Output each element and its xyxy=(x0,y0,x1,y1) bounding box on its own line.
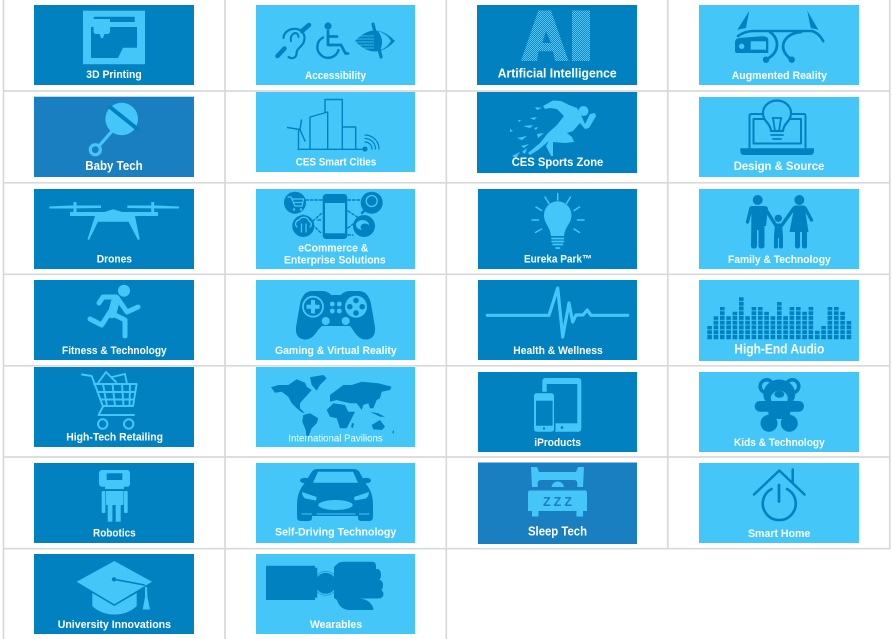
icon: car front xyxy=(297,469,373,521)
icon: laptop with bulb xyxy=(740,100,814,155)
label: High-Tech Retailing xyxy=(66,432,163,444)
icon: game controller xyxy=(296,291,375,340)
label: Kids & Technology xyxy=(734,437,825,449)
icon: shopping cart xyxy=(82,372,137,429)
icon: tablet and phone xyxy=(532,378,581,433)
label: 3D Printing xyxy=(86,69,142,81)
label: Wearables xyxy=(310,619,362,631)
label: Enterprise Solutions xyxy=(284,254,386,266)
tile: Artificial Intelligence xyxy=(477,5,637,85)
label: Augmented Reality xyxy=(732,70,828,82)
tile: Wearables xyxy=(256,554,415,634)
label: Smart Home xyxy=(748,528,810,540)
tile: Self-Driving Technology xyxy=(256,463,415,543)
icon: smart city skyline xyxy=(288,100,379,152)
icon: bed with zzz: ZZZ xyxy=(543,495,572,509)
label: CES Sports Zone xyxy=(512,155,604,169)
label: Health & Wellness xyxy=(513,345,603,357)
tile: High-Tech Retailing xyxy=(34,367,194,447)
icon: running person xyxy=(90,285,138,336)
label: Artificial Intelligence xyxy=(498,66,617,80)
label: Gaming & Virtual Reality xyxy=(275,345,398,357)
icon: audio equalizer xyxy=(705,297,853,339)
tile: CES Sports Zone xyxy=(477,92,637,173)
tile: International Pavilions xyxy=(256,367,415,447)
icon: AR glasses xyxy=(735,11,823,63)
icon: heartbeat line xyxy=(487,288,628,337)
icon: AI circuit letters xyxy=(521,10,590,61)
label: Baby Tech xyxy=(85,159,143,173)
tile: University Innovations xyxy=(34,554,194,634)
icon: drone xyxy=(49,202,179,240)
label: International Pavilions xyxy=(288,434,383,445)
icon: teddy bear xyxy=(755,380,804,432)
tile: Sleep Tech xyxy=(478,462,637,544)
icon: light bulb with rays xyxy=(532,194,584,248)
tile: Drones xyxy=(34,189,194,269)
tile: Design & Source xyxy=(699,97,859,177)
label: University Innovations xyxy=(58,619,171,631)
tile: Accessibility xyxy=(256,5,415,85)
icon: 3D printer xyxy=(83,11,145,64)
label: iProducts xyxy=(534,437,581,449)
tile: Gaming & Virtual Reality xyxy=(256,280,415,360)
icon: phone network xyxy=(284,192,383,239)
label: Fitness & Technology xyxy=(62,345,168,357)
icon: world map xyxy=(271,375,394,438)
tile: 3D Printing xyxy=(34,5,194,85)
label: Eureka Park™ xyxy=(524,254,592,266)
tile: High-End Audio xyxy=(699,280,859,361)
label: Design & Source xyxy=(734,159,825,173)
label xyxy=(284,242,386,266)
label: Robotics xyxy=(93,528,136,540)
label: Sleep Tech xyxy=(528,525,587,539)
tile: Robotics xyxy=(34,463,194,543)
icon: accessibility symbols xyxy=(278,22,395,58)
icon: bed with zzz xyxy=(528,467,587,516)
icon: baby rattle xyxy=(90,103,138,155)
label: Drones xyxy=(97,253,132,265)
label: eCommerce & xyxy=(298,242,368,254)
label: Accessibility xyxy=(305,70,367,82)
label: High-End Audio xyxy=(734,340,824,356)
tile: eCommerce & Enterprise Solutions xyxy=(256,189,415,269)
label: Family & Technology xyxy=(728,254,832,266)
tile: Augmented Reality xyxy=(699,5,859,85)
tile: Smart Home xyxy=(699,463,859,543)
icon: graduation cap xyxy=(77,561,152,614)
tile: Baby Tech xyxy=(34,97,194,177)
tile: iProducts xyxy=(478,372,637,452)
tile: Health & Wellness xyxy=(478,280,637,360)
label: Self-Driving Technology xyxy=(275,527,397,539)
label: CES Smart Cities xyxy=(296,157,376,169)
icon: family xyxy=(748,195,812,248)
icon: wrist with watch xyxy=(266,562,384,610)
tile: CES Smart Cities xyxy=(256,92,415,172)
icon: robot xyxy=(99,470,130,522)
icon: house with power button xyxy=(754,470,804,520)
tile: Eureka Park xyxy=(478,189,637,269)
icon: sprinter xyxy=(510,100,596,158)
tile: Fitness & Technology xyxy=(34,280,194,360)
tile: Family & Technology xyxy=(699,189,859,269)
tile: Kids & Technology xyxy=(699,372,859,452)
